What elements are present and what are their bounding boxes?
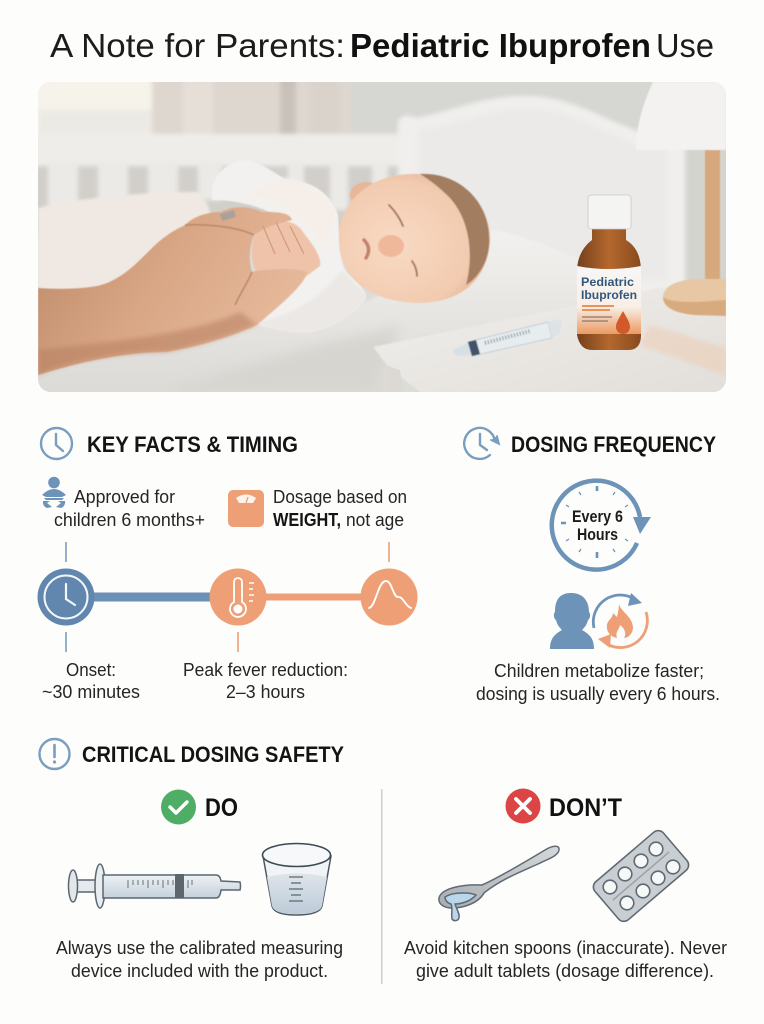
tick: bottom orange (237, 632, 239, 652)
clock dial: every 6 hours: Every 6 (572, 507, 623, 526)
timeline connector: blue (90, 592, 212, 602)
text: peak reduction: Peak fever reduction: (183, 659, 348, 680)
text: do instruction (56, 937, 343, 981)
text: do instruction: device included with the product. (71, 960, 328, 981)
panel: don't (404, 788, 727, 981)
tick: top orange (388, 542, 390, 562)
title (50, 27, 714, 64)
icon: blister pack (591, 828, 691, 924)
heading: dosing frequency: DOSING FREQUENCY (511, 432, 716, 457)
icon: child silhouette (550, 593, 594, 649)
text: don't instruction: give adult tablets (dosage difference). (416, 960, 714, 981)
medicine bottle (577, 195, 641, 350)
blanket (38, 192, 210, 296)
syringe on nightstand (452, 319, 562, 356)
text: weight-based dosage: WEIGHT, (273, 509, 341, 530)
text: do instruction: Always use the calibrated measuring (56, 937, 343, 958)
timeline connector: orange (264, 594, 364, 600)
text: metabolize explanation: dosing is usually every 6 hours. (476, 683, 720, 704)
baby hand (251, 221, 321, 277)
heading: don't: DON’T (549, 794, 622, 822)
heading: safety: CRITICAL DOSING SAFETY (82, 742, 344, 767)
text: don't instruction (404, 937, 727, 981)
tick: top blue (65, 542, 67, 562)
baby head (339, 174, 490, 303)
text: approved age: Approved for (74, 486, 175, 507)
title: Pediatric Ibuprofen (350, 27, 651, 64)
lamp (636, 82, 726, 316)
title: Use (656, 27, 714, 64)
mattress (40, 296, 577, 390)
clock dial: every 6 hours: Hours (577, 525, 618, 544)
text: peak reduction: 2–3 hours (226, 681, 305, 702)
panel: do (56, 790, 343, 981)
adult hand and forearm (38, 207, 307, 375)
icon: metabolism cycle with flame (593, 593, 647, 648)
heading: do: DO (205, 794, 238, 822)
timeline node: clock (38, 568, 94, 626)
nightstand (373, 287, 726, 392)
text: approved age: children 6 months+ (54, 509, 205, 530)
text: onset: ~30 minutes (42, 681, 140, 702)
icon: baby (42, 477, 66, 508)
text: weight-based dosage: Dosage based on (273, 486, 407, 507)
section: critical dosing safety (40, 739, 727, 984)
section: dosing frequency (464, 428, 720, 704)
clock dial: every 6 hours (552, 481, 651, 570)
text: onset (42, 659, 140, 702)
medicine bottle: Ibuprofen (581, 290, 637, 302)
text: metabolize explanation: Children metabolize faster; (494, 660, 704, 681)
photo: parent holding sleeping baby's hand with medicine on nightstand (30, 75, 740, 392)
text: peak reduction (183, 659, 348, 702)
icon: clock outline (41, 428, 72, 459)
text: onset: Onset: (66, 659, 116, 680)
icon: exclamation circle (40, 739, 70, 769)
icon: measuring cup (262, 844, 331, 915)
icon: kitchen spoon with drip (439, 846, 559, 921)
icon: red cross (506, 788, 540, 824)
title: A Note for Parents: (50, 27, 345, 64)
heading: key facts: KEY FACTS & TIMING (87, 432, 298, 457)
tick: bottom blue (65, 632, 67, 652)
medicine bottle: Pediatric (581, 277, 635, 289)
timeline node: thermometer (210, 568, 266, 626)
section: key facts and timing (38, 428, 418, 702)
text: weight-based dosage (273, 486, 407, 530)
baby fingers (263, 222, 304, 254)
icon: oral syringe (68, 864, 240, 908)
icon: green check (161, 790, 196, 824)
text: don't instruction: Avoid kitchen spoons (inaccurate). Never (404, 937, 727, 958)
text: metabolize explanation (476, 660, 720, 704)
text: weight-based dosage: not age (346, 509, 404, 530)
onesie (212, 161, 366, 332)
icon: weighing scale (228, 490, 264, 527)
icon: clock with arrow (464, 428, 499, 459)
text: approved age (54, 486, 205, 530)
timeline node: peak curve (360, 568, 418, 626)
